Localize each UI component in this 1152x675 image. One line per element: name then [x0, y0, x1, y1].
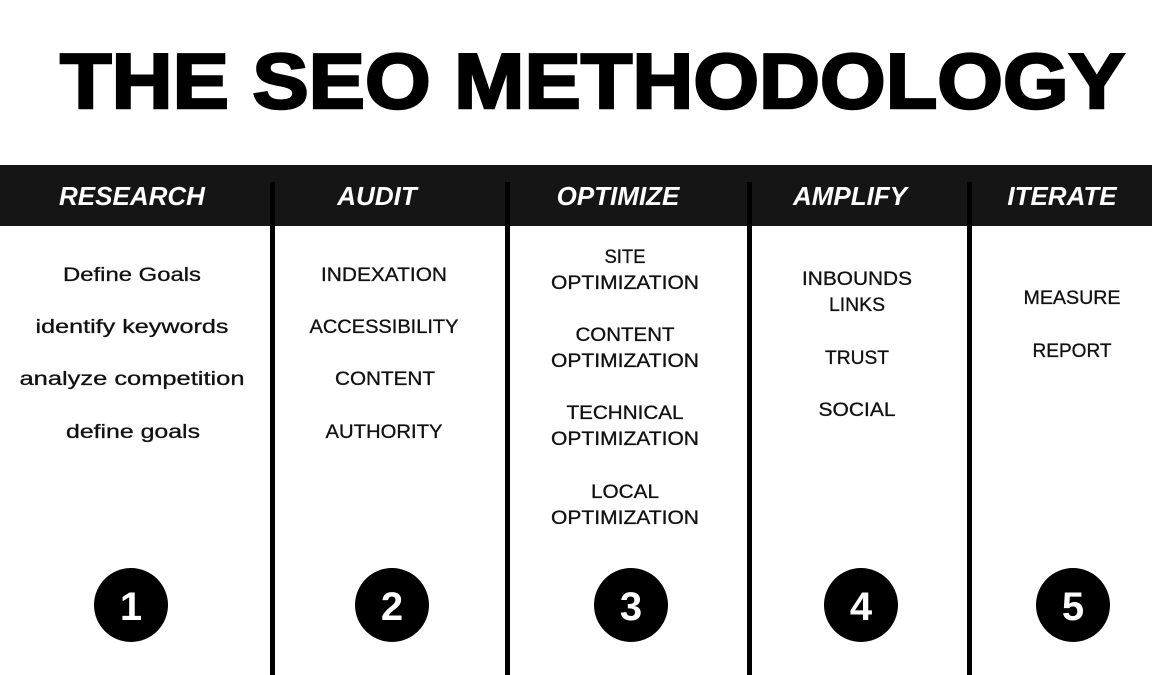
panel: audit: INDEXATION [321, 265, 447, 286]
panel: research: analyze competition [20, 369, 244, 390]
panel: amplify [802, 269, 912, 421]
number circles: 5 [1062, 585, 1084, 629]
panel: optimize: SITE [604, 247, 646, 268]
panel: research: identify keywords [36, 317, 228, 338]
number circles [94, 568, 1110, 642]
panel: audit: AUTHORITY [326, 422, 443, 443]
panel: research: define goals [66, 422, 200, 443]
header bar: AUDIT [336, 181, 419, 211]
panel: research: Define Goals [63, 265, 201, 286]
panel: audit [310, 265, 459, 443]
number circles: 4 [850, 585, 873, 629]
header bar: RESEARCH [59, 181, 206, 211]
panel: optimize: OPTIMIZATION [551, 351, 699, 372]
header bar [0, 165, 1152, 226]
panel: amplify: SOCIAL [818, 400, 896, 421]
panel: audit: CONTENT [335, 369, 435, 390]
panel: optimize: TECHNICAL [566, 403, 684, 424]
panel: amplify: INBOUNDS [802, 269, 912, 290]
number circles: 2 [381, 585, 403, 629]
number circles: 1 [120, 585, 142, 629]
panel: research [20, 265, 244, 443]
panel: iterate [1024, 288, 1120, 362]
panel: optimize: CONTENT [576, 325, 675, 346]
panel: optimize: LOCAL [591, 482, 659, 503]
panel: optimize: OPTIMIZATION [551, 508, 699, 529]
panel: optimize: OPTIMIZATION [551, 429, 699, 450]
panel: iterate: REPORT [1032, 341, 1112, 362]
panel: amplify: TRUST [825, 348, 889, 369]
panel: iterate: MEASURE [1024, 288, 1120, 309]
number circles: 3 [620, 585, 642, 629]
panel: amplify: LINKS [829, 295, 885, 316]
panel: audit: ACCESSIBILITY [310, 317, 459, 338]
panel: optimize: OPTIMIZATION [551, 273, 699, 294]
header bar: OPTIMIZE [557, 181, 680, 211]
header bar: AMPLIFY [792, 181, 910, 211]
header bar: ITERATE [1007, 181, 1117, 211]
title: THE SEO METHODOLOGY [60, 37, 1125, 125]
panel: optimize [551, 247, 699, 529]
